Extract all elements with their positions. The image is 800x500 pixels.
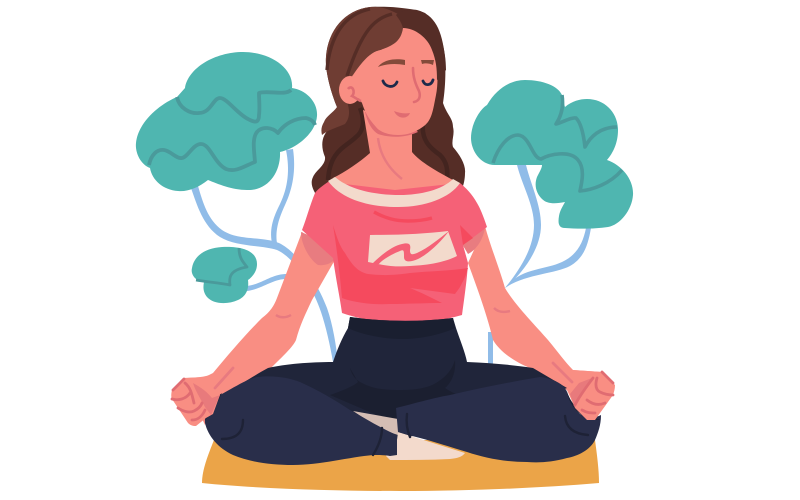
hair strands front [327, 9, 392, 76]
mouth [394, 111, 410, 118]
shirt dark shading [333, 225, 468, 304]
right hand fingers [553, 363, 613, 413]
left tree branches [191, 149, 338, 362]
nose [413, 68, 420, 102]
left hand fingers [172, 368, 233, 420]
right tree canopy [471, 80, 633, 229]
left sleeve shadow [301, 232, 336, 265]
shirt logo [368, 231, 457, 266]
neck line [378, 138, 402, 179]
hair strands back [328, 108, 447, 180]
eyebrows [378, 59, 434, 67]
t-shirt [302, 177, 487, 323]
hair front dark right side [396, 10, 446, 80]
closed eyes [383, 80, 433, 86]
right tree branches [488, 165, 591, 364]
yoga mat [202, 440, 599, 491]
right tree [471, 80, 633, 364]
pants creases [222, 414, 588, 455]
left tree small canopy [192, 247, 257, 303]
left tree [136, 52, 338, 362]
pants waist and torso [215, 317, 567, 440]
left hand [171, 368, 233, 426]
waistband [348, 317, 455, 339]
right arm [468, 226, 602, 420]
face [350, 26, 438, 135]
left palm shade [193, 383, 220, 415]
right leg [396, 377, 601, 462]
left tree large canopy [136, 52, 317, 191]
shirt logo zigzag [372, 231, 449, 264]
right sleeve shadow [462, 228, 485, 254]
ear [339, 76, 361, 104]
knee shadows [205, 388, 601, 420]
jaw shadow [365, 112, 418, 137]
inner ear [348, 87, 361, 101]
shirt collar [328, 177, 460, 207]
neck and chest [333, 110, 453, 205]
elbow creases [276, 308, 510, 317]
right tree canopy veins [493, 95, 622, 191]
hair front light [321, 7, 403, 135]
right foot [386, 432, 465, 460]
right hand [553, 363, 615, 420]
right palm shade [570, 378, 592, 405]
pants crotch shadow [330, 360, 470, 425]
hair back [312, 7, 465, 200]
left foot shaded [353, 411, 398, 435]
shirt fold [374, 212, 432, 221]
left arm [183, 232, 336, 425]
left leg [205, 376, 397, 465]
left tree small canopy vein [196, 248, 247, 285]
shirt right shading [460, 225, 473, 245]
left tree canopy veins [149, 90, 315, 170]
